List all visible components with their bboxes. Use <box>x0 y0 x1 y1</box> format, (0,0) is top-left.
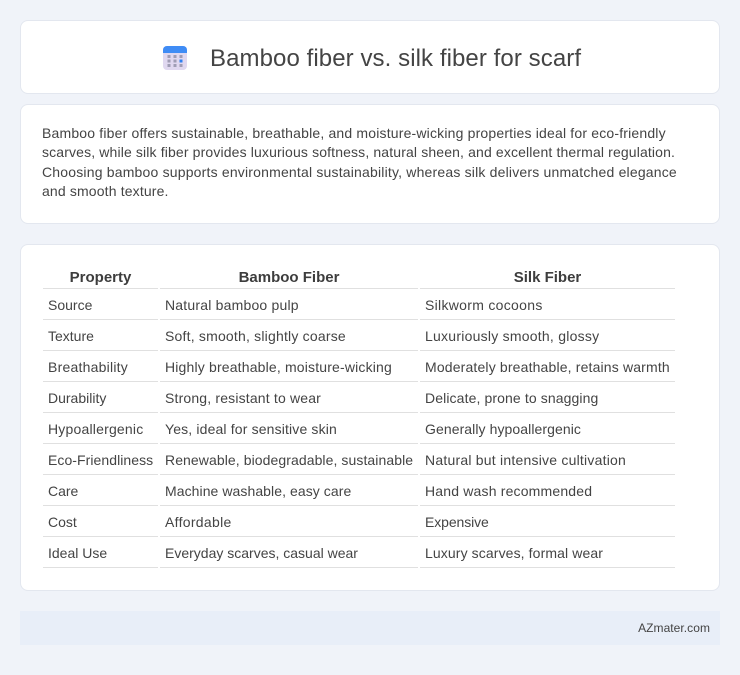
row: Eco-Friendliness <box>48 452 626 468</box>
row: Hypoallergenic: Yes, ideal for sensitive skin <box>165 421 337 437</box>
footer credit: AZmater.com <box>638 621 710 635</box>
row: Durability: Delicate, prone to snagging <box>425 390 598 406</box>
row: Durability: Durability <box>48 390 106 406</box>
row: Care: Hand wash recommended <box>425 483 592 499</box>
row: Care <box>48 483 592 499</box>
title: Bamboo fiber vs. silk fiber for scarf <box>210 45 581 72</box>
row: Source: Source <box>48 297 92 313</box>
row: Hypoallergenic <box>48 421 581 437</box>
row: Cost: Expensive <box>425 514 489 530</box>
row: Hypoallergenic: Hypoallergenic <box>48 421 143 437</box>
row: Eco-Friendliness: Renewable, biodegradable, sustainable <box>165 452 413 468</box>
summary text: and smooth texture. <box>42 183 169 199</box>
row: Eco-Friendliness: Natural but intensive cultivation <box>425 452 626 468</box>
row: Texture <box>48 328 600 344</box>
row: Durability: Strong, resistant to wear <box>165 390 321 406</box>
panel: comparison table card <box>20 244 720 591</box>
row: Source <box>48 297 543 313</box>
footer bar <box>20 611 720 645</box>
row: Ideal Use: Everyday scarves, casual wear <box>165 545 358 561</box>
row: Breathability: Highly breathable, moisture-wicking <box>165 359 392 375</box>
row: Breathability: Moderately breathable, retains warmth <box>425 359 670 375</box>
summary text <box>42 125 677 199</box>
row: Source: Natural bamboo pulp <box>165 297 299 313</box>
row: Source: Silkworm cocoons <box>425 297 543 313</box>
row: Texture: Soft, smooth, slightly coarse <box>165 328 346 344</box>
row: Ideal Use: Luxury scarves, formal wear <box>425 545 603 561</box>
row: Eco-Friendliness: Eco-Friendliness <box>48 452 153 468</box>
row: Cost <box>48 514 489 530</box>
column heading: Property: Property <box>70 269 131 286</box>
column heading: Silk Fiber: Silk Fiber <box>514 269 581 286</box>
row: Texture: Texture <box>48 328 94 344</box>
summary text: scarves, while silk fiber provides luxurious softness, natural sheen, and excellent thermal regulation. <box>42 144 675 160</box>
row: Breathability <box>48 359 670 375</box>
row: Care: Machine washable, easy care <box>165 483 351 499</box>
summary text: Choosing bamboo supports environmental sustainability, whereas silk delivers unmatched elegance <box>42 164 677 180</box>
panel: title card <box>20 20 720 94</box>
row: Ideal Use: Ideal Use <box>48 545 107 561</box>
row: Cost: Affordable <box>165 514 232 530</box>
column heading: Bamboo Fiber: Bamboo Fiber <box>239 269 339 286</box>
row: Cost: Cost <box>48 514 77 530</box>
row: Care: Care <box>48 483 78 499</box>
row: Hypoallergenic: Generally hypoallergenic <box>425 421 581 437</box>
panel: summary card <box>20 104 720 224</box>
row: Texture: Luxuriously smooth, glossy <box>425 328 599 344</box>
row: Durability <box>48 390 598 406</box>
row: Ideal Use <box>48 545 603 561</box>
row: Breathability: Breathability <box>48 359 128 375</box>
icon: calendar <box>163 46 187 70</box>
summary text: Bamboo fiber offers sustainable, breathable, and moisture-wicking properties ideal for eco-friendly <box>42 125 666 141</box>
